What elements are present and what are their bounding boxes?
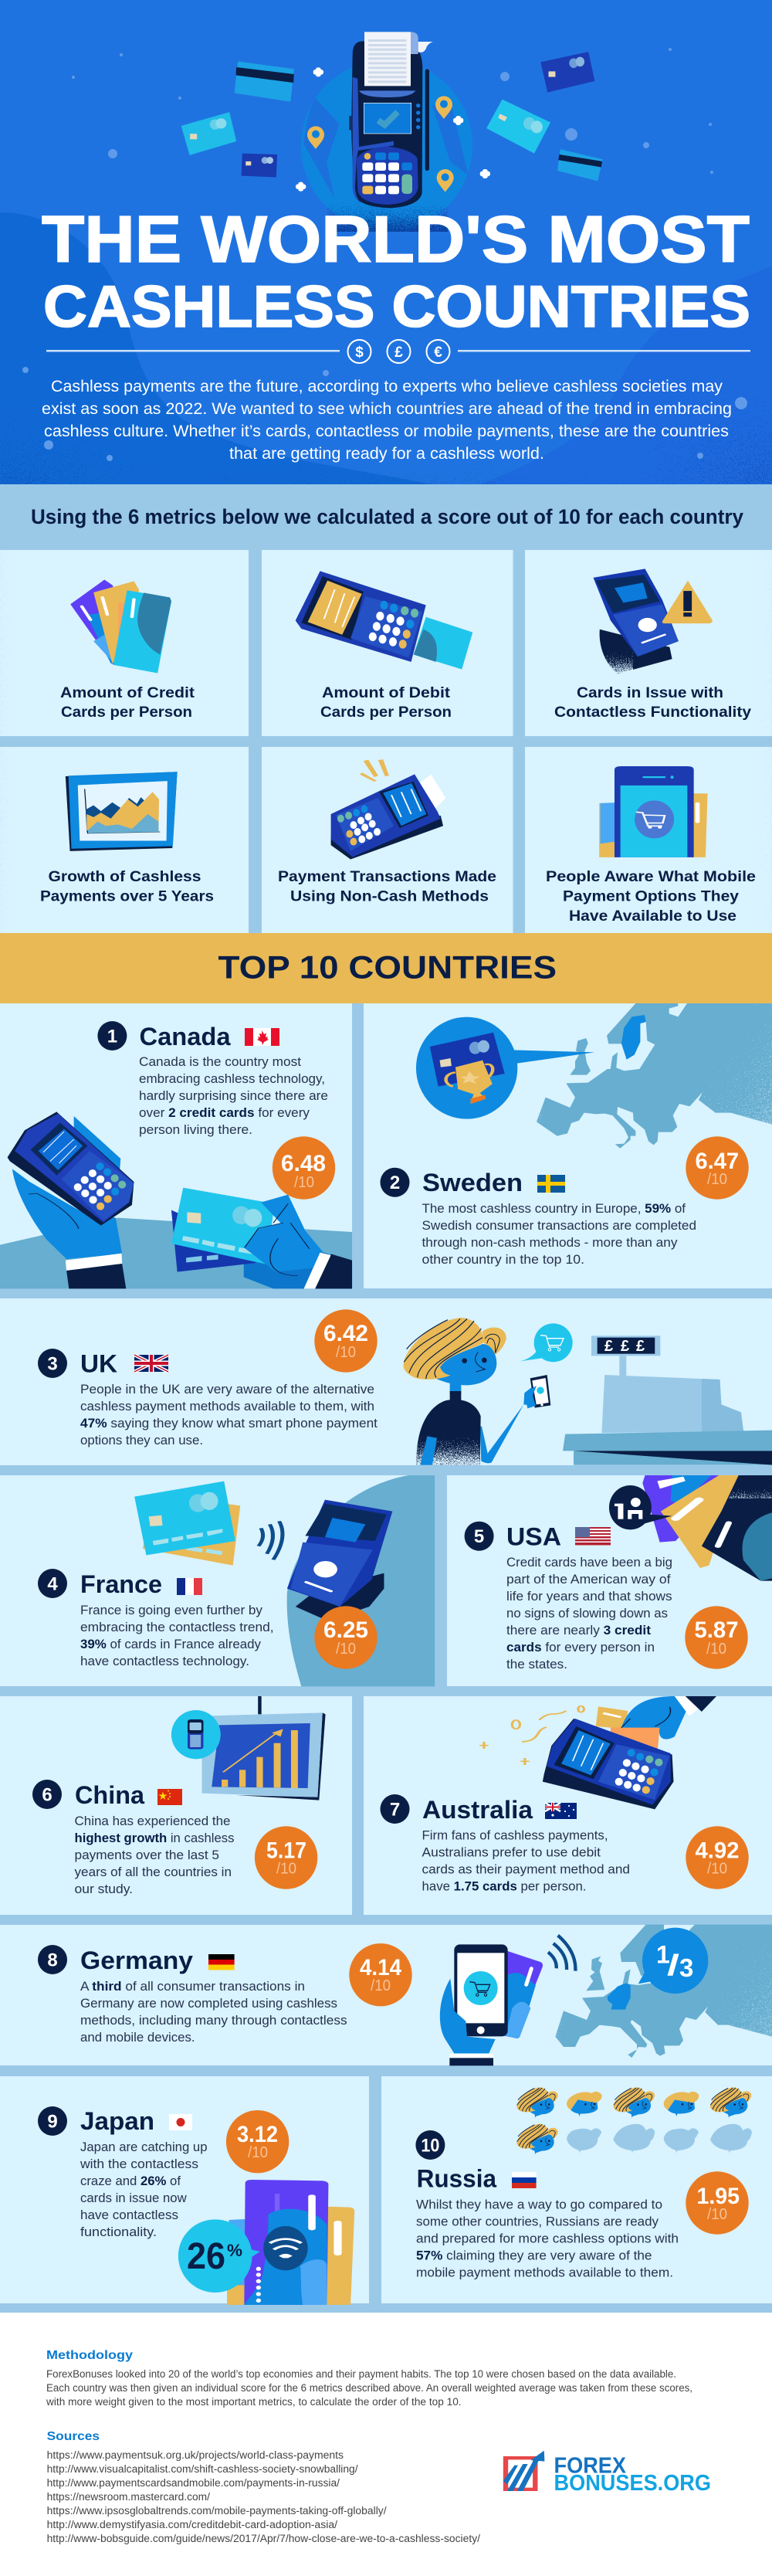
name: Japan <box>80 2107 154 2135</box>
intro text: exist as soon as 2022. We wanted to see which countries are ahead of the trend in embracing <box>42 400 732 418</box>
title: CASHLESS COUNTRIES <box>43 274 750 340</box>
score: /10 <box>707 2206 727 2223</box>
body text: The most cashless country in Europe, 59% of <box>422 1201 686 1216</box>
label: Payments over 5 Years <box>40 888 214 905</box>
label <box>320 685 452 721</box>
score: 1.95 <box>696 2184 740 2209</box>
number badge <box>465 1522 494 1551</box>
flag: France <box>177 1578 202 1595</box>
number badge: 5 <box>474 1526 484 1547</box>
panel: 8 Germany <box>0 1925 772 2065</box>
label: Have Available to Use <box>569 908 736 925</box>
score: /10 <box>276 1861 296 1878</box>
score <box>273 1136 335 1200</box>
name: China <box>75 1781 144 1809</box>
panel: 3 UK <box>0 1298 772 1465</box>
score <box>685 1606 748 1669</box>
score <box>314 1309 378 1373</box>
panel: 7 Australia <box>364 1696 772 1915</box>
logo: ForexBonuses.org: FOREX <box>554 2454 627 2479</box>
metrics section background <box>0 484 772 933</box>
illustration: contactless card stack and 26% bubble <box>178 2180 354 2305</box>
logo: ForexBonuses.org <box>503 2451 711 2496</box>
score: 6.25 <box>323 1617 368 1643</box>
number badge <box>380 1168 409 1197</box>
body text: the states. <box>506 1657 567 1672</box>
score: /10 <box>707 1861 727 1878</box>
body text: life for years and that shows <box>506 1589 672 1604</box>
countries section background <box>0 1003 772 2313</box>
illustration: contactless card and reader <box>134 1475 435 1686</box>
illustration: till counter <box>563 1336 772 1465</box>
number badge: 6 <box>42 1784 52 1806</box>
name: Sweden <box>422 1169 523 1196</box>
label: Amount of Debit <box>322 685 451 701</box>
icon: fanned cards <box>70 580 171 673</box>
body text <box>74 1814 235 1896</box>
number badge <box>380 1794 409 1824</box>
body text <box>506 1555 672 1672</box>
illustration: hands, terminal and cards <box>0 1112 352 1288</box>
illustration: credit cards and callout <box>609 1475 772 1581</box>
body text: highest growth in cashless <box>74 1831 235 1845</box>
illustration: growth board and phone <box>171 1696 326 1800</box>
number badge <box>415 2130 445 2160</box>
panel: credit cards per person <box>0 550 249 736</box>
panel: 6 China <box>0 1696 352 1915</box>
body text <box>80 1603 274 1668</box>
flag: Japan <box>169 2114 192 2130</box>
body text: mobile payment methods available to them. <box>416 2265 673 2279</box>
sources: https://www.ipsosglobaltrends.com/mobile-payments-taking-off-globally/ <box>47 2505 387 2517</box>
name: Australia <box>422 1796 533 1824</box>
label: Cards per Person <box>320 704 452 721</box>
price sign text <box>604 1338 645 1355</box>
intro text: that are getting ready for a cashless world. <box>229 445 544 463</box>
score <box>686 2171 749 2235</box>
body text: payments over the last 5 <box>74 1848 219 1862</box>
score <box>314 1606 378 1669</box>
sources: https://newsroom.mastercard.com/ <box>47 2491 210 2503</box>
intro text: cashless culture. Whether it’s cards, contactless or mobile payments, these are the countries <box>44 423 729 440</box>
label <box>60 685 195 721</box>
body text <box>416 2197 679 2279</box>
panel: 2 Sweden <box>364 1003 772 1288</box>
body text: cards in issue now <box>80 2191 187 2205</box>
sources <box>47 2430 480 2544</box>
26% text: 26 <box>187 2236 225 2277</box>
body text <box>139 1054 328 1137</box>
number badge: 4 <box>47 1574 58 1594</box>
panel: aware of mobile payment options <box>525 747 772 933</box>
sources: https://www.paymentsuk.org.uk/projects/world-class-payments <box>47 2449 344 2461</box>
score: /10 <box>707 1171 727 1188</box>
number badge <box>32 1780 62 1809</box>
flag: Russia <box>512 2172 537 2188</box>
flag: UK <box>134 1355 168 1372</box>
body text: Japan are catching up <box>80 2140 207 2154</box>
sources: http://www.paymentscardsandmobile.com/payments-in-russia/ <box>47 2477 340 2489</box>
body text: cashless payment methods available to them, with <box>80 1399 374 1414</box>
label: Payment Options They <box>563 888 739 905</box>
score: /10 <box>248 2144 268 2161</box>
body text: embracing the contactless trend, <box>80 1620 274 1634</box>
flag: Australia <box>545 1803 577 1819</box>
number badge <box>38 1945 67 1974</box>
illustration: map, phone and one third callout <box>440 1925 772 2065</box>
body text: Firm fans of cashless payments, <box>422 1828 608 1843</box>
body text: hardly surprising since there are <box>139 1088 328 1103</box>
label: Contactless Functionality <box>554 704 751 721</box>
body text: have contactless <box>80 2208 178 2222</box>
body text: 47% saying they know what smart phone payment <box>80 1416 378 1431</box>
body text: no signs of slowing down as <box>506 1606 668 1621</box>
name: USA <box>506 1523 561 1551</box>
logo: ForexBonuses.org: BONUSES.ORG <box>554 2471 711 2496</box>
body text: person living there. <box>139 1122 252 1137</box>
floating cards <box>181 52 603 181</box>
icon: phone with shopping cart <box>599 766 708 857</box>
body text: have contactless technology. <box>80 1654 249 1668</box>
body text: 39% of cards in France already <box>80 1637 261 1651</box>
number badge: 8 <box>47 1950 58 1971</box>
sources: http://www.demystifyasia.com/creditdebit-card-adoption-asia/ <box>47 2519 337 2530</box>
panel: contactless cards in issue <box>525 550 772 736</box>
methodology: with more weight given to the most important metrics, to calculate the order of the top 10. <box>46 2396 462 2408</box>
score: /10 <box>371 1977 391 1994</box>
score: 6.42 <box>323 1321 368 1346</box>
score <box>226 2110 289 2173</box>
sources: http://www.visualcapitalist.com/shift-cashless-society-snowballing/ <box>47 2463 358 2475</box>
score: /10 <box>336 1344 356 1361</box>
currency divider: $ <box>355 344 364 361</box>
banner: top 10 countries: TOP 10 COUNTRIES <box>218 949 557 986</box>
flag: Germany <box>208 1954 235 1970</box>
body text: have 1.75 cards per person. <box>422 1879 587 1894</box>
body text: China has experienced the <box>74 1814 230 1828</box>
methodology <box>46 2349 692 2408</box>
body text: through non-cash methods - more than any <box>422 1235 678 1250</box>
callout fraction: 3 <box>679 1953 693 1982</box>
body text: methods, including many through contactless <box>80 2013 347 2028</box>
body text: part of the American way of <box>506 1572 671 1587</box>
score: 5.17 <box>266 1838 306 1864</box>
26% text: % <box>227 2241 242 2260</box>
score <box>686 1826 749 1889</box>
body text: Swedish consumer transactions are completed <box>422 1218 696 1233</box>
title <box>42 203 750 340</box>
panel: 1 Canada <box>0 1003 352 1288</box>
title: THE WORLD'S MOST <box>42 203 750 277</box>
score: 4.14 <box>360 1955 401 1980</box>
currency divider: £ <box>394 344 403 361</box>
panel: 9 Japan <box>0 2076 369 2305</box>
name: Germany <box>80 1946 193 1974</box>
body text <box>80 1979 347 2045</box>
number badge: 3 <box>47 1353 58 1375</box>
body text: embracing cashless technology, <box>139 1071 325 1086</box>
icon: contactless reader and warning <box>594 568 713 674</box>
body text: cards as their payment method and <box>422 1862 630 1877</box>
number badge <box>97 1021 127 1050</box>
currency divider: € <box>434 344 442 361</box>
illustration: terminal, hand and card <box>479 1696 716 1809</box>
name: Canada <box>139 1023 231 1050</box>
flag: China <box>157 1789 182 1805</box>
score <box>349 1943 412 2006</box>
illustration: Europe map with Sweden highlighted <box>537 1003 772 1149</box>
name: France <box>80 1570 162 1598</box>
number badge: 1 <box>107 1026 117 1047</box>
body text: with the contactless <box>80 2157 198 2171</box>
body text: some other countries, Russians are ready <box>416 2214 659 2228</box>
flag: Sweden <box>537 1175 565 1193</box>
body text: our study. <box>74 1882 133 1896</box>
body text: functionality. <box>80 2225 157 2239</box>
body text: Canada is the country most <box>139 1054 301 1069</box>
score: 6.48 <box>281 1151 326 1176</box>
score: 3.12 <box>237 2122 278 2147</box>
body text: Credit cards have been a big <box>506 1555 672 1570</box>
number badge <box>38 1349 67 1378</box>
flag: USA <box>575 1527 611 1546</box>
sources: http://www-bobsguide.com/guide/news/2017/Apr/7/how-close-are-we-to-a-cashless-society/ <box>47 2533 480 2544</box>
body text: A third of all consumer transactions in <box>80 1979 305 1994</box>
flag: Canada <box>245 1028 279 1046</box>
panel: 4 France <box>0 1475 435 1686</box>
label <box>40 869 214 905</box>
score: 5.87 <box>695 1617 738 1643</box>
body text <box>422 1201 696 1267</box>
name: Russia <box>417 2165 496 2193</box>
panel: 5 USA <box>447 1475 772 1686</box>
price sign text: £ <box>604 1338 613 1355</box>
currency divider <box>46 340 750 363</box>
panel: growth of cashless payments <box>0 747 249 933</box>
methodology: Methodology <box>46 2349 133 2362</box>
callout fraction <box>656 1941 693 1982</box>
number badge <box>38 1569 67 1598</box>
body text <box>80 1382 378 1448</box>
illustration: ten people, six highlighted <box>516 2087 752 2154</box>
body text: Germany are now completed using cashless <box>80 1996 337 2011</box>
label: Amount of Credit <box>60 685 195 701</box>
label <box>278 869 496 905</box>
price sign text: £ <box>621 1338 629 1355</box>
methodology: Each country was then given an individual score for the 6 metrics described above. An overall weighted average was taken from these scores, <box>46 2382 692 2394</box>
header panel <box>0 0 772 618</box>
body text: over 2 credit cards for every <box>139 1105 310 1120</box>
label <box>546 869 756 925</box>
number badge: 9 <box>47 2112 58 2132</box>
body text: options they can use. <box>80 1433 203 1448</box>
price sign text: £ <box>636 1338 645 1355</box>
number badge: 10 <box>421 2135 439 2157</box>
sources: Sources <box>47 2430 100 2443</box>
methodology: ForexBonuses looked into 20 of the world’s top economies and their payment habits. The top 10 were chosen based on the data available. <box>46 2368 676 2380</box>
label: Cards in Issue with <box>577 685 723 701</box>
panel: non-cash payment transactions <box>262 747 513 933</box>
panel: debit cards per person <box>262 550 513 736</box>
callout fraction: 1 <box>656 1941 670 1969</box>
body text: cards for every person in <box>506 1640 655 1655</box>
body text: and prepared for more cashless options with <box>416 2231 679 2245</box>
label: Cards per Person <box>61 704 192 721</box>
score: /10 <box>336 1641 356 1658</box>
label <box>554 685 751 721</box>
number badge: 7 <box>390 1800 400 1820</box>
stipple at bottom of header <box>0 340 772 618</box>
body text: France is going even further by <box>80 1603 262 1617</box>
body text: 57% claiming they are very aware of the <box>416 2248 652 2262</box>
body text: Whilst they have a way to go compared to <box>416 2197 662 2211</box>
callout fraction: / <box>667 1950 680 1982</box>
label: Growth of Cashless <box>48 869 201 885</box>
number badge: 2 <box>390 1173 400 1193</box>
body text: People in the UK are very aware of the alternative <box>80 1382 374 1397</box>
score: 4.92 <box>695 1838 740 1864</box>
icon: terminal printing receipt <box>331 759 445 860</box>
body text: craze and 26% of <box>80 2174 181 2188</box>
panel: 10 Russia <box>381 2076 772 2303</box>
faint background dots <box>22 48 747 461</box>
body text <box>422 1828 630 1894</box>
body text <box>80 2140 207 2239</box>
score: /10 <box>294 1174 314 1191</box>
body text: other country in the top 10. <box>422 1252 584 1267</box>
body text: and mobile devices. <box>80 2030 195 2045</box>
label: Payment Transactions Made <box>278 869 496 885</box>
body text: there are nearly 3 credit <box>506 1623 651 1638</box>
score: 6.47 <box>695 1149 739 1174</box>
illustration: woman with phone <box>404 1318 573 1465</box>
icon: terminal with card <box>296 571 472 669</box>
body text: Australians prefer to use debit <box>422 1845 601 1860</box>
label: People Aware What Mobile <box>546 869 756 885</box>
body text: years of all the countries in <box>74 1865 232 1879</box>
illustration: trophy callout <box>416 1017 594 1119</box>
score <box>255 1826 317 1889</box>
icon: framed area chart <box>66 772 178 851</box>
intro text: Cashless payments are the future, according to experts who believe cashless societies may <box>51 378 723 395</box>
intro text <box>42 378 732 463</box>
label: Using Non-Cash Methods <box>290 888 489 905</box>
icon: card terminal on globe <box>296 32 490 232</box>
score: /10 <box>706 1641 726 1658</box>
number badge <box>38 2106 67 2136</box>
banner: top 10 countries <box>0 933 772 1003</box>
name: UK <box>80 1350 117 1378</box>
score <box>686 1136 749 1200</box>
metrics heading: Using the 6 metrics below we calculated a score out of 10 for each country <box>31 505 743 528</box>
